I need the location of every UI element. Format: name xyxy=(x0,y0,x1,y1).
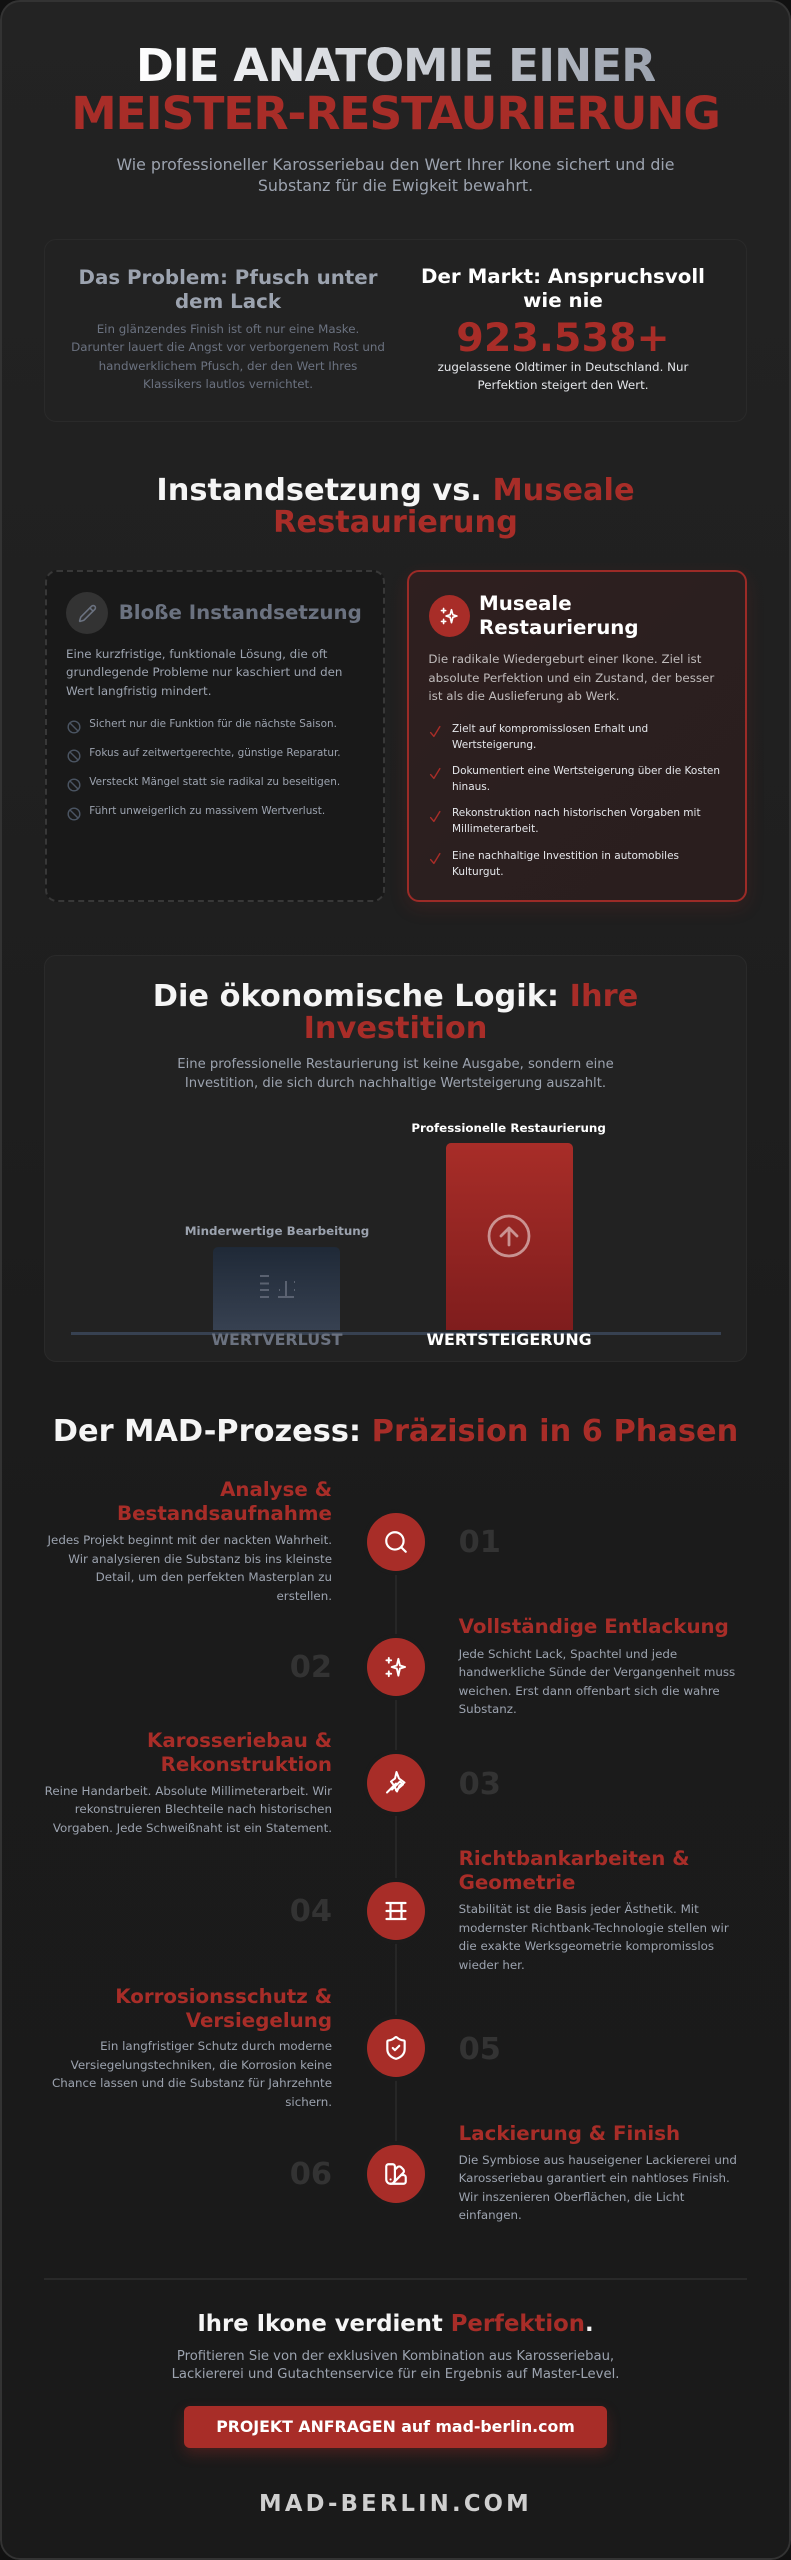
step 03 xyxy=(45,1729,501,1835)
button: PROJEKT ANFRAGEN auf mad-berlin.com xyxy=(216,2417,575,2436)
step heading: Richtbankarbeiten & xyxy=(459,1847,690,1870)
icon: sparkles xyxy=(428,595,470,637)
icon: check xyxy=(430,768,440,780)
item text: Versteckt Mängel statt sie radikal zu beseitigen. xyxy=(89,776,340,788)
bar label: high: Professionelle Restaurierung xyxy=(411,1121,606,1135)
step 04 xyxy=(44,1847,747,1977)
step heading xyxy=(117,1478,332,1525)
step text xyxy=(44,2037,332,2111)
step heading: Bestandsaufnahme xyxy=(117,1502,332,1525)
market heading xyxy=(421,265,705,312)
step text xyxy=(44,1782,332,1837)
problem heading: Das Problem: Pfusch unter xyxy=(79,266,377,289)
icon: check xyxy=(430,726,440,738)
step heading: Rekonstruktion xyxy=(161,1753,332,1776)
call to action xyxy=(0,2305,791,2465)
card text: Die radikale Wiedergeburt einer Ikone. Ziel ist xyxy=(428,652,701,666)
step heading: Karosseriebau & xyxy=(147,1729,332,1752)
card text xyxy=(428,652,714,703)
problem text: Ein glänzendes Finish ist oft nur eine Maske. xyxy=(97,322,359,336)
step text: Jedes Projekt beginnt mit der nackten Wahrheit. xyxy=(48,1533,332,1547)
icon: ban xyxy=(68,750,80,762)
heading: comparison: Instandsetzung vs. Museale xyxy=(156,473,635,508)
step number: 04 xyxy=(290,1894,332,1929)
cta text xyxy=(0,2348,791,2385)
panel: economic logic xyxy=(44,955,747,1362)
intro text: Investition, die sich durch nachhaltige Wertsteigerung auszahlt. xyxy=(185,1076,606,1091)
icon: straightening bench xyxy=(367,1882,425,1940)
card heading: Museale xyxy=(479,592,572,615)
icon: shield check xyxy=(367,2019,425,2077)
step 05 xyxy=(44,1985,747,2115)
step text: Stabilität ist die Basis jeder Ästhetik. Mit xyxy=(459,1902,699,1916)
card heading: Bloße Instandsetzung xyxy=(119,601,362,624)
footer brand: MAD-BERLIN.COM xyxy=(259,2490,532,2516)
market heading: Der Markt: Anspruchsvoll xyxy=(421,265,705,288)
market number: 923.538+ xyxy=(456,315,670,361)
step text xyxy=(459,2151,737,2225)
market heading: wie nie xyxy=(523,289,603,312)
step text: Die Symbiose aus hauseigener Lackiererei und xyxy=(459,2153,737,2167)
step heading xyxy=(44,1985,332,2033)
cta text: Profitieren Sie von der exklusiven Kombination aus Karosseriebau, xyxy=(177,2349,614,2364)
item text: Sichert nur die Funktion für die nächste Saison. xyxy=(89,718,337,730)
card text: Wert langfristig mindert. xyxy=(66,684,211,698)
item text xyxy=(452,723,648,751)
heading: Die ökonomische Logik: Ihre xyxy=(153,979,638,1014)
heading: process: Der MAD-Prozess: Präzision in 6 Phasen xyxy=(53,1414,738,1448)
button xyxy=(184,2406,607,2448)
step text: Chance lassen und die Substanz für Jahrzehnte xyxy=(52,2076,332,2090)
divider xyxy=(44,2278,747,2280)
intro text xyxy=(177,1057,614,1091)
card text xyxy=(66,647,342,698)
step number: 03 xyxy=(459,1767,501,1802)
step text xyxy=(458,1647,735,1716)
icon: broken value xyxy=(260,1275,295,1298)
problem text: handwerklichem Pfusch, der den Wert Ihres xyxy=(99,359,357,373)
icon: arrow up circle xyxy=(488,1214,530,1258)
step text: modernster Richtbank-Technologie stellen wir xyxy=(459,1921,729,1935)
step text: handwerkliche Sünde der Vergangenheit muss xyxy=(459,1665,735,1679)
step text: sichern. xyxy=(285,2095,332,2109)
step number: 06 xyxy=(290,2157,332,2192)
card heading xyxy=(479,592,639,639)
list: benefits xyxy=(430,723,720,878)
step 02 xyxy=(290,1615,735,1716)
item text: Wertsteigerung. xyxy=(452,739,536,751)
list: drawbacks xyxy=(68,718,341,820)
item text: Zielt auf kompromisslosen Erhalt und xyxy=(452,723,648,735)
axis xyxy=(71,1332,721,1335)
step text: Wir inszenieren Oberflächen, die Licht xyxy=(459,2190,684,2204)
panel: problem and market xyxy=(44,239,747,422)
icon: sparkles xyxy=(367,1638,425,1696)
icon: ban xyxy=(68,808,80,820)
axis label: Wertverlust: WERTVERLUST xyxy=(212,1330,342,1349)
step text: einfangen. xyxy=(459,2208,522,2222)
icon: search xyxy=(367,1513,425,1571)
item text xyxy=(452,807,701,835)
market text xyxy=(438,360,688,392)
title: DIE ANATOMIE EINER xyxy=(136,39,655,92)
item text: Rekonstruktion nach historischen Vorgaben mit xyxy=(452,807,701,819)
item text: Eine nachhaltige Investition in automobiles xyxy=(452,850,679,862)
step text: Jede Schicht Lack, Spachtel und jede xyxy=(459,1647,677,1661)
icon: check xyxy=(430,852,440,864)
step text: Wir analysieren die Substanz bis ins kleinste xyxy=(68,1552,332,1566)
item text xyxy=(452,765,720,793)
subtitle: Substanz für die Ewigkeit bewahrt. xyxy=(258,176,533,195)
title: MEISTER-RESTAURIERUNG xyxy=(71,87,720,140)
card text: absolute Perfektion und ein Zustand, der besser xyxy=(428,671,714,685)
cta heading: Ihre Ikone verdient Perfektion. xyxy=(197,2311,594,2337)
heading xyxy=(153,979,638,1046)
step text: Substanz. xyxy=(459,1702,517,1716)
step heading: Versiegelung xyxy=(186,2009,332,2032)
title xyxy=(71,39,720,140)
step number: 02 xyxy=(290,1650,332,1685)
step heading: Vollständige Entlackung xyxy=(459,1615,729,1638)
timeline line xyxy=(395,1542,397,2174)
problem text xyxy=(71,322,385,391)
subtitle: Wie professioneller Karosseriebau den Wert Ihrer Ikone sichert und die xyxy=(116,155,674,174)
heading: comparison xyxy=(156,473,635,540)
card text: grundlegende Probleme nur kaschiert und den xyxy=(66,665,342,679)
problem heading xyxy=(79,266,378,313)
bar: high value xyxy=(446,1143,573,1330)
market text: zugelassene Oldtimer in Deutschland. Nur xyxy=(438,360,688,374)
item text: Kulturgut. xyxy=(452,866,504,878)
market text: Perfektion steigert den Wert. xyxy=(478,378,648,392)
step text xyxy=(459,1900,729,1974)
step text: Detail, um den perfekten Masterplan zu xyxy=(96,1570,332,1584)
item text: hinaus. xyxy=(452,781,490,793)
problem text: Darunter lauert die Angst vor verborgenem Rost und xyxy=(71,340,385,354)
problem text: Klassikers lautlos vernichtet. xyxy=(143,377,313,391)
subtitle xyxy=(116,155,674,195)
item text: Führt unweigerlich zu massivem Wertverlust. xyxy=(89,805,325,817)
cta text: Lackiererei und Gutachtenservice für ein Ergebnis auf Master-Level. xyxy=(172,2367,619,2382)
axis label: Wertsteigerung: WERTSTEIGERUNG xyxy=(426,1330,592,1349)
step heading xyxy=(44,1729,332,1777)
heading: Investition xyxy=(304,1011,487,1046)
card text: ist als die Auslieferung ab Werk. xyxy=(428,689,619,703)
item text: Dokumentiert eine Wertsteigerung über die Kosten xyxy=(452,765,720,777)
step 06 xyxy=(44,2122,747,2230)
problem heading: dem Lack xyxy=(175,290,281,313)
step text: Reine Handarbeit. Absolute Millimeterarbeit. Wir xyxy=(45,1784,332,1798)
step text xyxy=(46,1533,332,1602)
intro text: Eine professionelle Restaurierung ist keine Ausgabe, sondern eine xyxy=(177,1057,614,1072)
bar chart xyxy=(71,1121,721,1349)
step text: weichen. Erst dann offenbart sich die wahre xyxy=(459,1684,720,1698)
step heading: Korrosionsschutz & xyxy=(115,1985,332,2008)
step text: Versiegelungstechniken, die Korrosion keine xyxy=(71,2058,332,2072)
panel: museale Restaurierung xyxy=(405,570,749,910)
icon: ban xyxy=(68,778,80,792)
step text: Ein langfristiger Schutz durch moderne xyxy=(100,2039,332,2053)
icon: ban xyxy=(68,720,80,734)
icon: pencil xyxy=(66,592,108,634)
step heading: Lackierung & Finish xyxy=(459,2122,680,2145)
step number: 05 xyxy=(459,2032,501,2067)
step text: die exakte Werksgeometrie kompromisslos xyxy=(459,1939,714,1953)
step heading xyxy=(459,1847,690,1895)
heading: comparison: Restaurierung xyxy=(273,505,518,540)
item text xyxy=(452,850,679,878)
icon: swatch book xyxy=(367,2145,425,2203)
card text: Eine kurzfristige, funktionale Lösung, die oft xyxy=(66,647,327,661)
item text: Fokus auf zeitwertgerechte, günstige Reparatur. xyxy=(89,747,341,759)
bar label: low: Minderwertige Bearbeitung xyxy=(185,1224,369,1238)
item text: Millimeterarbeit. xyxy=(452,823,539,835)
step heading: Geometrie xyxy=(459,1871,575,1894)
panel: blosse Instandsetzung xyxy=(45,570,385,902)
step text: rekonstruieren Blechteile nach historischen xyxy=(75,1802,332,1816)
step text: Karosseriebau garantiert ein nahtloses Finish. xyxy=(459,2171,730,2185)
step text: wieder her. xyxy=(459,1958,525,1972)
icon: hammer and star xyxy=(367,1754,425,1812)
icon: check xyxy=(430,810,440,822)
bar: low value xyxy=(213,1247,340,1330)
step text: Vorgaben. Jede Schweißnaht ist ein Statement. xyxy=(53,1821,332,1835)
step 01 xyxy=(46,1478,501,1602)
step number: 01 xyxy=(459,1525,501,1560)
card heading: Restaurierung xyxy=(479,616,639,639)
step heading: Analyse & xyxy=(220,1478,332,1501)
step text: erstellen. xyxy=(277,1588,332,1602)
